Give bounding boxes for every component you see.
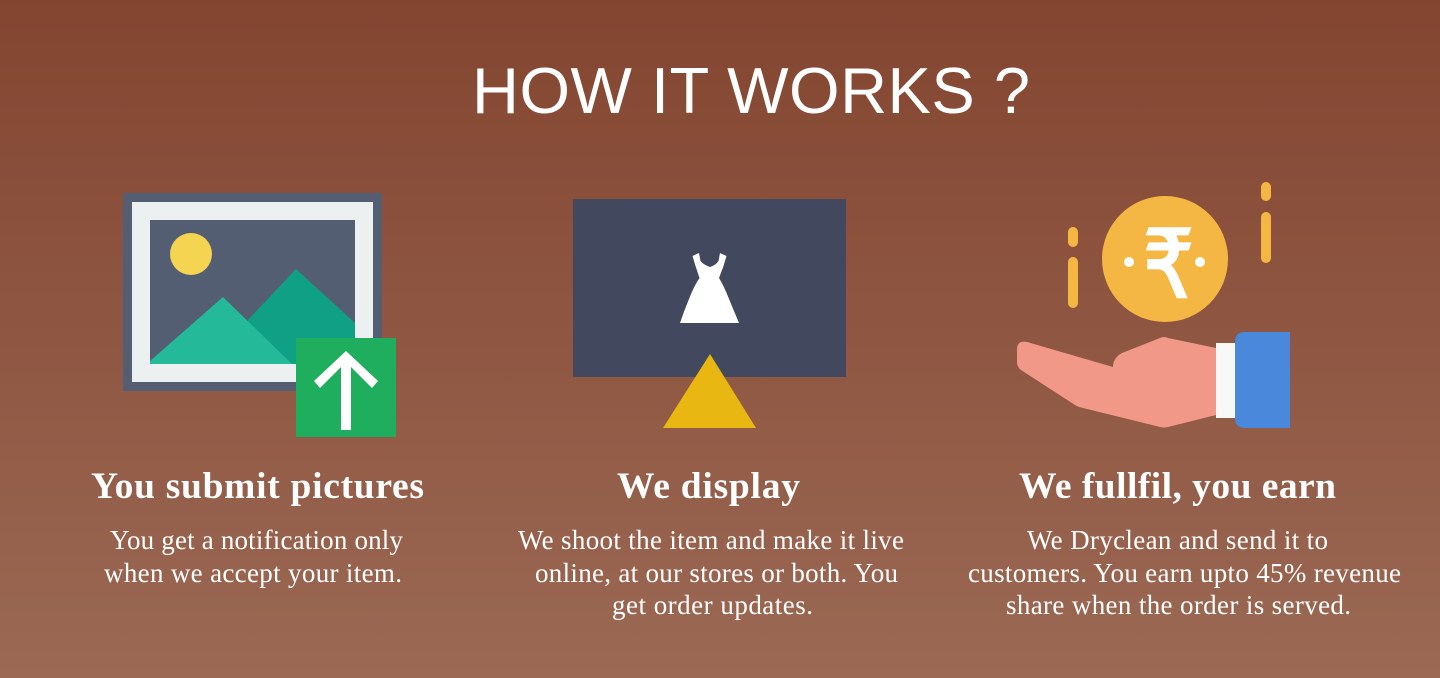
heading: we fullfil, you earn: We fullfil, you earn (1019, 466, 1336, 507)
text block: earn description: We Dryclean and send it to (1027, 525, 1328, 555)
panel: you submit pictures (91, 193, 424, 588)
icon: hand with rupee coin: ₹ (1143, 210, 1194, 320)
text block: submit description: You get a notification only (110, 525, 404, 555)
heading: you submit pictures: You submit pictures (91, 466, 424, 507)
icon: picture upload (123, 193, 396, 437)
text block: display description: get order updates. (612, 590, 813, 620)
text block: submit description: when we accept your item. (104, 558, 402, 588)
heading: we display: We display (617, 466, 800, 507)
title: HOW IT WORKS ? (472, 54, 1030, 127)
text block: display description: We shoot the item and make it live (518, 525, 904, 555)
panel: we display (518, 199, 904, 620)
text block: submit description (104, 525, 404, 588)
text block: earn description: share when the order is served. (1006, 590, 1351, 620)
text block: display description (518, 525, 904, 620)
icon: dress on display screen (573, 199, 846, 428)
text block: earn description (968, 525, 1401, 620)
panel: we fulfil, you earn (968, 182, 1401, 620)
icon: hand with rupee coin (1017, 182, 1290, 428)
text block: display description: online, at our stores or both. You (535, 558, 898, 588)
text block: earn description: customers. You earn upto 45% revenue (968, 558, 1401, 588)
